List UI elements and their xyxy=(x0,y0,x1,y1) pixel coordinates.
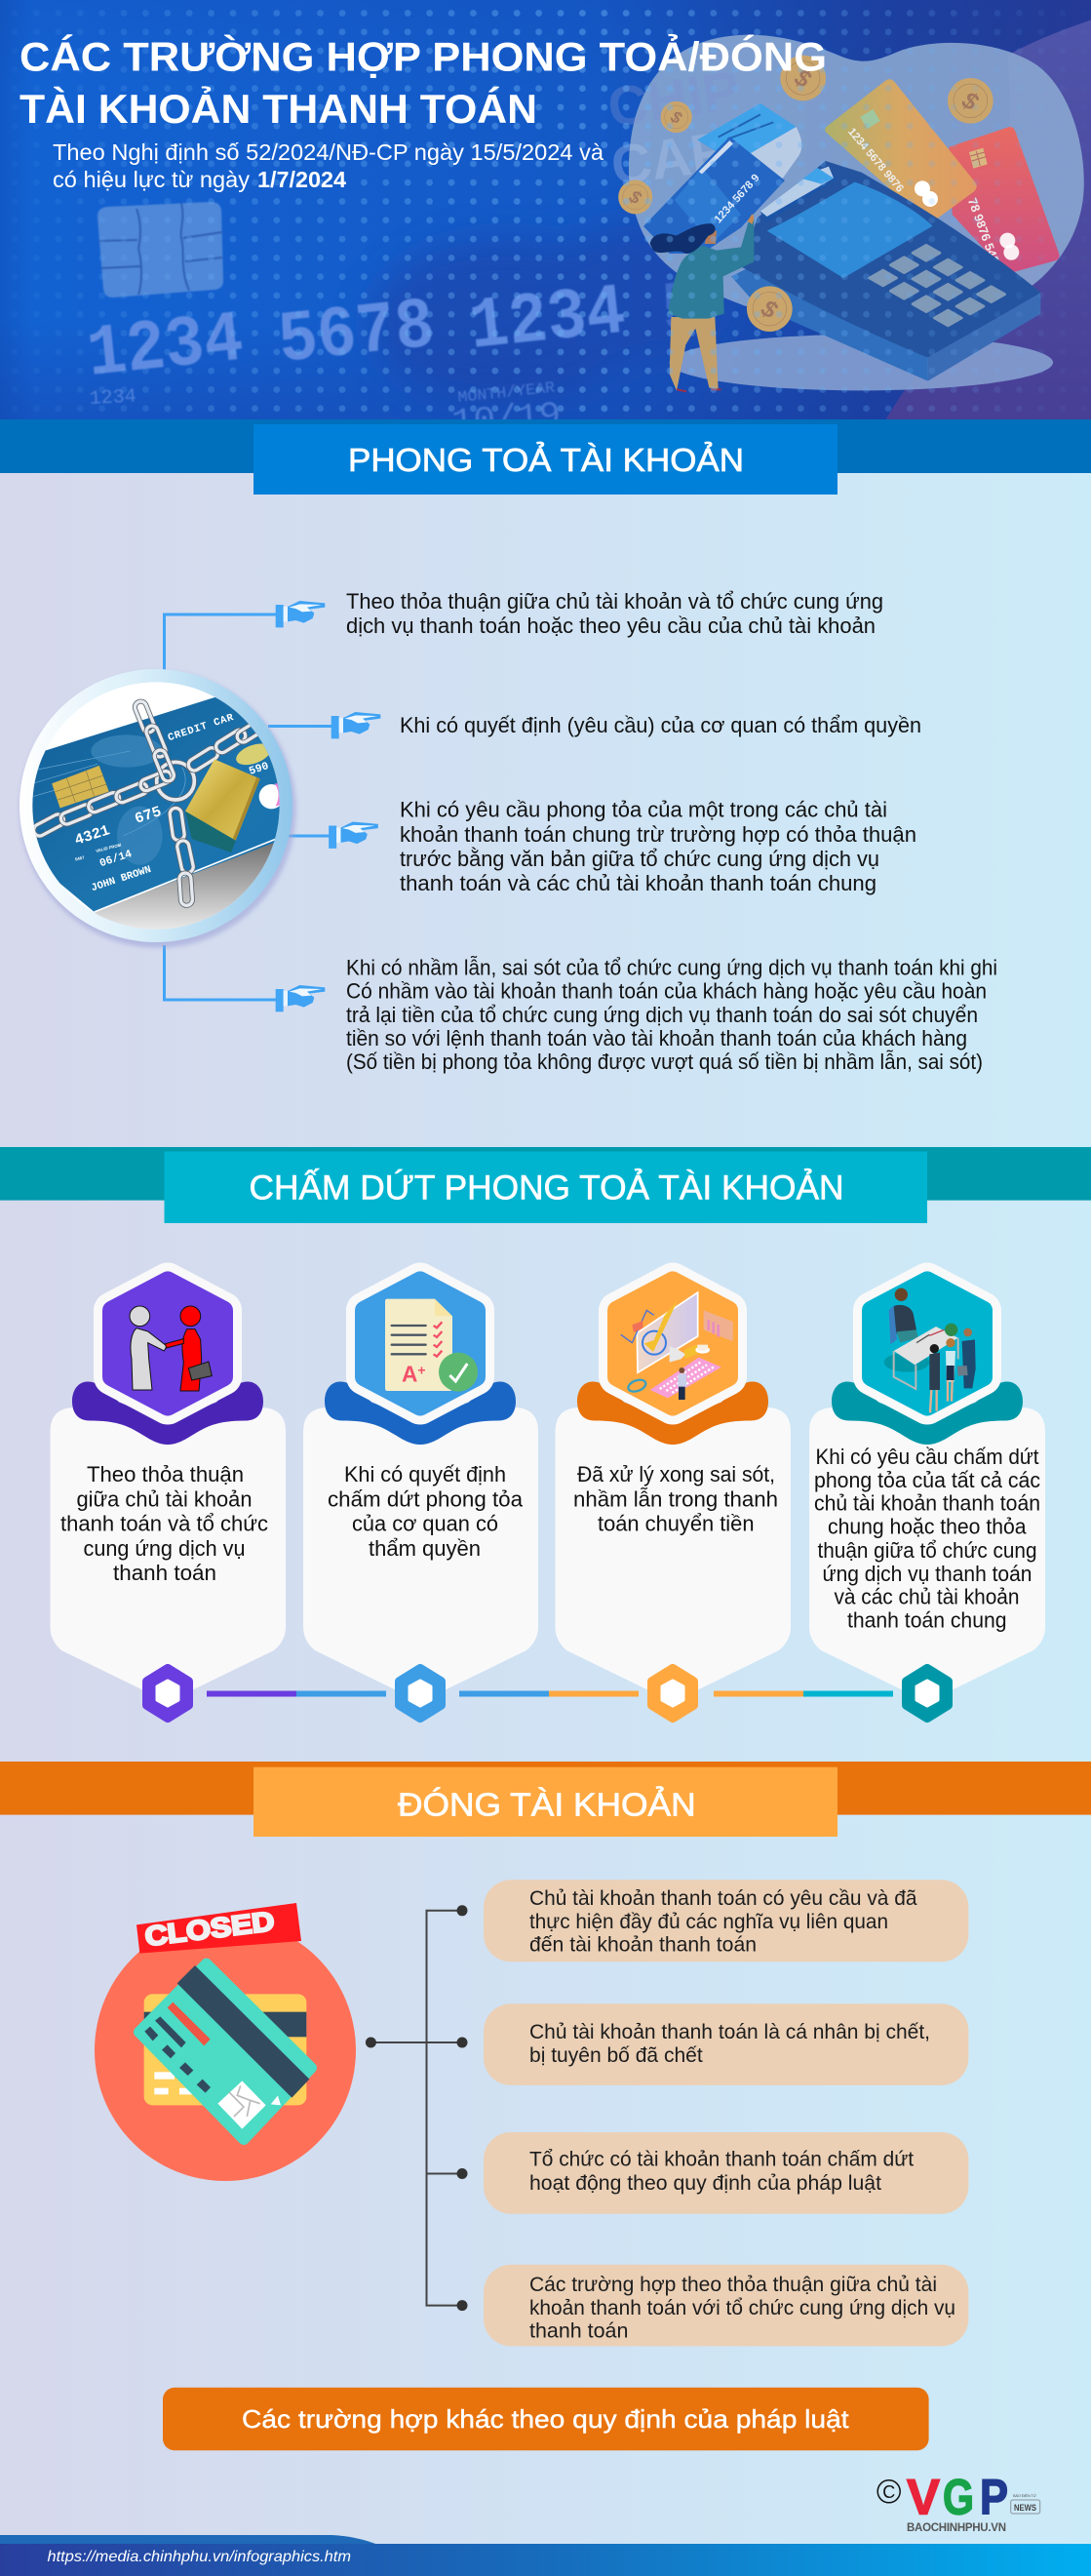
text: cung ứng dịch vụ xyxy=(84,1536,246,1561)
pill 4 xyxy=(484,2265,968,2346)
text: condition 4: trả lại tiền của tổ chức cung ứng dịch vụ thanh toán do sai sót chuyển xyxy=(346,1003,978,1027)
text: condition 1: dịch vụ thanh toán hoặc theo yêu cầu của chủ tài khoản xyxy=(346,614,876,638)
icon: meeting people xyxy=(884,1288,976,1412)
text: Đã xử lý xong sai sót, xyxy=(577,1462,775,1486)
logo: VGP: NEWS xyxy=(1014,2503,1036,2514)
text: nhầm lẫn trong thanh xyxy=(573,1486,778,1512)
card background: map texture xyxy=(367,224,677,402)
text: thanh toán và tổ chức xyxy=(60,1512,268,1535)
panel: phong toả conditions xyxy=(19,589,997,1074)
keypad xyxy=(870,245,1005,326)
pill 2: Chủ tài khoản thanh toán là cá nhân bị chết, xyxy=(529,2021,930,2043)
icon: closed card xyxy=(95,1903,356,2181)
text: Khi có yêu cầu chấm dứt xyxy=(815,1445,1039,1469)
logo: VGP: P xyxy=(980,2470,1008,2525)
text: condition 3: Khi có yêu cầu phong tỏa của một trong các chủ tài xyxy=(400,798,887,821)
dot pattern xyxy=(56,10,1043,412)
chains behind lock xyxy=(31,699,269,838)
text xyxy=(573,1462,778,1535)
text: condition 4: (Số tiền bị phong tỏa không được vượt quá số tiền bị nhầm lẫn, sai sót) xyxy=(346,1050,983,1074)
pill 3: Tổ chức có tài khoản thanh toán chấm dứt xyxy=(529,2148,914,2170)
text xyxy=(814,1445,1040,1633)
text: thanh toán chung xyxy=(847,1608,1006,1633)
timeline node 3 xyxy=(652,1669,693,1718)
red card: 78 9876 542 xyxy=(965,196,1001,265)
subtitle: có hiệu lực từ ngày xyxy=(53,167,251,192)
callout: other cases: Các trường hợp khác theo quy định của pháp luật xyxy=(242,2404,849,2434)
text: thẩm quyền xyxy=(369,1536,481,1561)
text xyxy=(60,1462,268,1585)
pill 1 xyxy=(484,1880,968,1962)
text: condition 1 xyxy=(346,589,883,638)
card 2 xyxy=(303,1282,538,1702)
text: condition 2: Khi có quyết định (yêu cầu) của cơ quan có thẩm quyền xyxy=(400,713,921,737)
text: toán chuyển tiền xyxy=(598,1512,755,1535)
heading: đóng tài khoản xyxy=(0,1762,1091,1837)
red card xyxy=(949,127,1059,274)
text: condition 4: tiền so với lệnh thanh toán vào tài khoản thanh toán của khách hàng xyxy=(346,1026,967,1050)
text: chấm dứt phong tỏa xyxy=(328,1486,524,1512)
text: condition 4: Có nhầm vào tài khoản thanh toán của khách hàng hoặc yêu cầu hoàn xyxy=(346,979,987,1004)
icon: graded document: A xyxy=(402,1361,417,1386)
yellow card: 1234 5678 9876 xyxy=(845,126,906,195)
hexagon badge xyxy=(577,1282,768,1445)
heading: chấm dứt phong toả tài khoản xyxy=(0,1147,1091,1223)
pill 2 xyxy=(484,2003,968,2085)
background card numbers: 1234 xyxy=(84,299,248,397)
text: thuận giữa tổ chức cung xyxy=(817,1538,1037,1563)
card text: 4321 xyxy=(72,821,112,850)
pill 4: Các trường hợp theo thỏa thuận giữa chủ tài xyxy=(529,2274,937,2296)
shadow ellipse xyxy=(670,335,1053,390)
pill 4: thanh toán xyxy=(529,2320,628,2343)
text: giữa chủ tài khoản xyxy=(76,1486,252,1512)
card text: 590 xyxy=(248,761,270,778)
pill 2: bị tuyên bố đã chết xyxy=(529,2044,703,2067)
background card numbers: 5678 xyxy=(275,286,439,383)
card text: JOHN BROWN xyxy=(90,864,153,894)
subtitle: Theo Nghị định số 52/2024/NĐ-CP ngày 15/5/2024 và xyxy=(53,139,604,165)
text: condition 3: thanh toán và các chủ tài khoản thanh toán chung xyxy=(400,871,877,895)
heading: chấm dứt phong toả tài khoản: CHẤM DỨT PHONG TOẢ TÀI KHOẢN xyxy=(250,1168,844,1207)
card 4 xyxy=(809,1282,1045,1702)
front coin xyxy=(747,286,793,332)
icon: handshake xyxy=(130,1306,212,1391)
timeline node 4 xyxy=(907,1669,948,1718)
footer bar: https://media.chinhphu.vn/infographics.htm xyxy=(47,2549,351,2565)
receipt xyxy=(697,103,801,182)
heading: đóng tài khoản: ĐÓNG TÀI KHOẢN xyxy=(398,1787,696,1823)
text: condition 1: Theo thỏa thuận giữa chủ tài khoản và tổ chức cung ứng xyxy=(346,589,883,614)
person xyxy=(650,214,754,391)
subtitle: 1/7/2024 xyxy=(257,167,346,192)
chain in front of lock xyxy=(169,808,194,906)
text xyxy=(328,1462,524,1561)
card text xyxy=(72,712,270,894)
card text: VALID FROM xyxy=(96,843,122,853)
POS terminal xyxy=(731,161,1040,381)
icon: pointing hand 3 xyxy=(329,821,378,849)
logo: VGP xyxy=(877,2470,1040,2534)
icon: pointing hand 1 xyxy=(276,601,325,627)
icon: pointing hand 4 xyxy=(276,985,325,1011)
timeline node 1 xyxy=(147,1669,188,1718)
text: chủ tài khoản thanh toán xyxy=(814,1491,1040,1516)
icon: graded document xyxy=(385,1299,478,1392)
text: Khi có quyết định xyxy=(344,1462,506,1486)
title xyxy=(19,33,827,132)
illustration: POS terminal, cards, person: CARD xyxy=(607,115,774,198)
panel: header banner xyxy=(0,0,1091,442)
text: phong tỏa của tất cả các xyxy=(814,1468,1040,1492)
card 1 xyxy=(51,1282,286,1702)
icon: computer check xyxy=(621,1292,733,1400)
padlock xyxy=(185,759,260,852)
card text: 5467 xyxy=(74,854,85,862)
background card numbers: 10/19 xyxy=(450,397,562,442)
connector lines xyxy=(164,614,332,1000)
subtitle xyxy=(53,139,604,192)
card 3 xyxy=(556,1282,791,1702)
coins xyxy=(780,56,826,100)
illustration: POS terminal, cards, person xyxy=(604,20,1091,422)
background card numbers xyxy=(90,283,674,419)
heading: phong toả tài khoản xyxy=(0,419,1091,495)
blue card xyxy=(643,137,785,254)
logo: VGP: C xyxy=(882,2482,895,2502)
panel: closing conditions xyxy=(95,1880,968,2346)
text: condition 3: khoản thanh toán chung trừ trường hợp có thỏa thuận xyxy=(400,822,916,847)
pill 1: Chủ tài khoản thanh toán có yêu cầu và đã xyxy=(529,1887,917,1910)
card chip xyxy=(52,766,109,808)
closed stamp xyxy=(136,1903,301,1954)
heading: phong toả tài khoản: PHONG TOẢ TÀI KHOẢN xyxy=(348,442,744,478)
text: của cơ quan có xyxy=(352,1512,498,1535)
tree connector xyxy=(366,1905,468,2311)
yellow card xyxy=(825,79,977,222)
background chip xyxy=(97,202,223,297)
text: condition 3 xyxy=(400,798,916,895)
card text: CREDIT CAR xyxy=(167,712,236,744)
background card numbers: MONTH/YEAR xyxy=(457,379,556,407)
background card numbers: 1234 xyxy=(466,272,630,370)
panel: termination cards xyxy=(51,1282,1045,1718)
text: condition 4 xyxy=(346,956,997,1074)
pill 3 xyxy=(484,2132,968,2214)
image: chained credit card xyxy=(19,669,296,948)
text: condition 4: Khi có nhầm lẫn, sai sót của tổ chức cung ứng dịch vụ thanh toán khi ghi xyxy=(346,956,997,979)
hexagon badge xyxy=(832,1282,1023,1445)
hexagon badge xyxy=(325,1282,516,1445)
hexagon badge xyxy=(72,1282,263,1445)
timeline connectors xyxy=(207,1691,893,1697)
text: chung hoặc theo thỏa xyxy=(828,1515,1027,1539)
text: ứng dịch vụ thanh toán xyxy=(823,1562,1032,1586)
illustration: POS terminal, cards, person: CHIP xyxy=(604,60,744,139)
text: Theo thỏa thuận xyxy=(87,1462,244,1486)
logo: VGP: BAOCHINHPHU.VN xyxy=(907,2522,1006,2534)
logo: VGP: V xyxy=(907,2470,940,2525)
card text: 675 xyxy=(133,803,164,828)
footer bar xyxy=(0,2535,1091,2576)
logo: VGP: BÁO ĐIỆN TỬ xyxy=(1013,2493,1037,2498)
text: và các chủ tài khoản xyxy=(835,1584,1020,1609)
pill 3: hoạt động theo quy định của pháp luật xyxy=(529,2172,881,2195)
logo: VGP: G xyxy=(943,2470,974,2525)
timeline node 2 xyxy=(400,1669,441,1718)
text: thanh toán xyxy=(113,1561,216,1585)
pill 1: đến tài khoản thanh toán xyxy=(529,1934,757,1957)
background card numbers: 5 xyxy=(657,268,709,354)
blue card: 1234 5678 9 xyxy=(713,172,762,225)
title: TÀI KHOẢN THANH TOÁN xyxy=(19,85,537,132)
pill 4: khoản thanh toán với tổ chức cung ứng dịch vụ xyxy=(529,2297,955,2319)
title: CÁC TRƯỜNG HỢP PHONG TOẢ/ĐÓNG xyxy=(19,33,827,80)
background card numbers: 1234 xyxy=(89,386,136,411)
icon: pointing hand 2 xyxy=(331,712,380,738)
pill 1: thực hiện đầy đủ các nghĩa vụ liên quan xyxy=(529,1911,888,1933)
callout: other cases xyxy=(163,2388,929,2450)
icon: graded document: + xyxy=(417,1362,426,1377)
closed stamp: CLOSED xyxy=(143,1906,276,1952)
text: condition 3: trước bằng văn bản giữa tổ chức cung ứng dịch vụ xyxy=(400,847,879,871)
card text: 06/14 xyxy=(98,849,134,870)
